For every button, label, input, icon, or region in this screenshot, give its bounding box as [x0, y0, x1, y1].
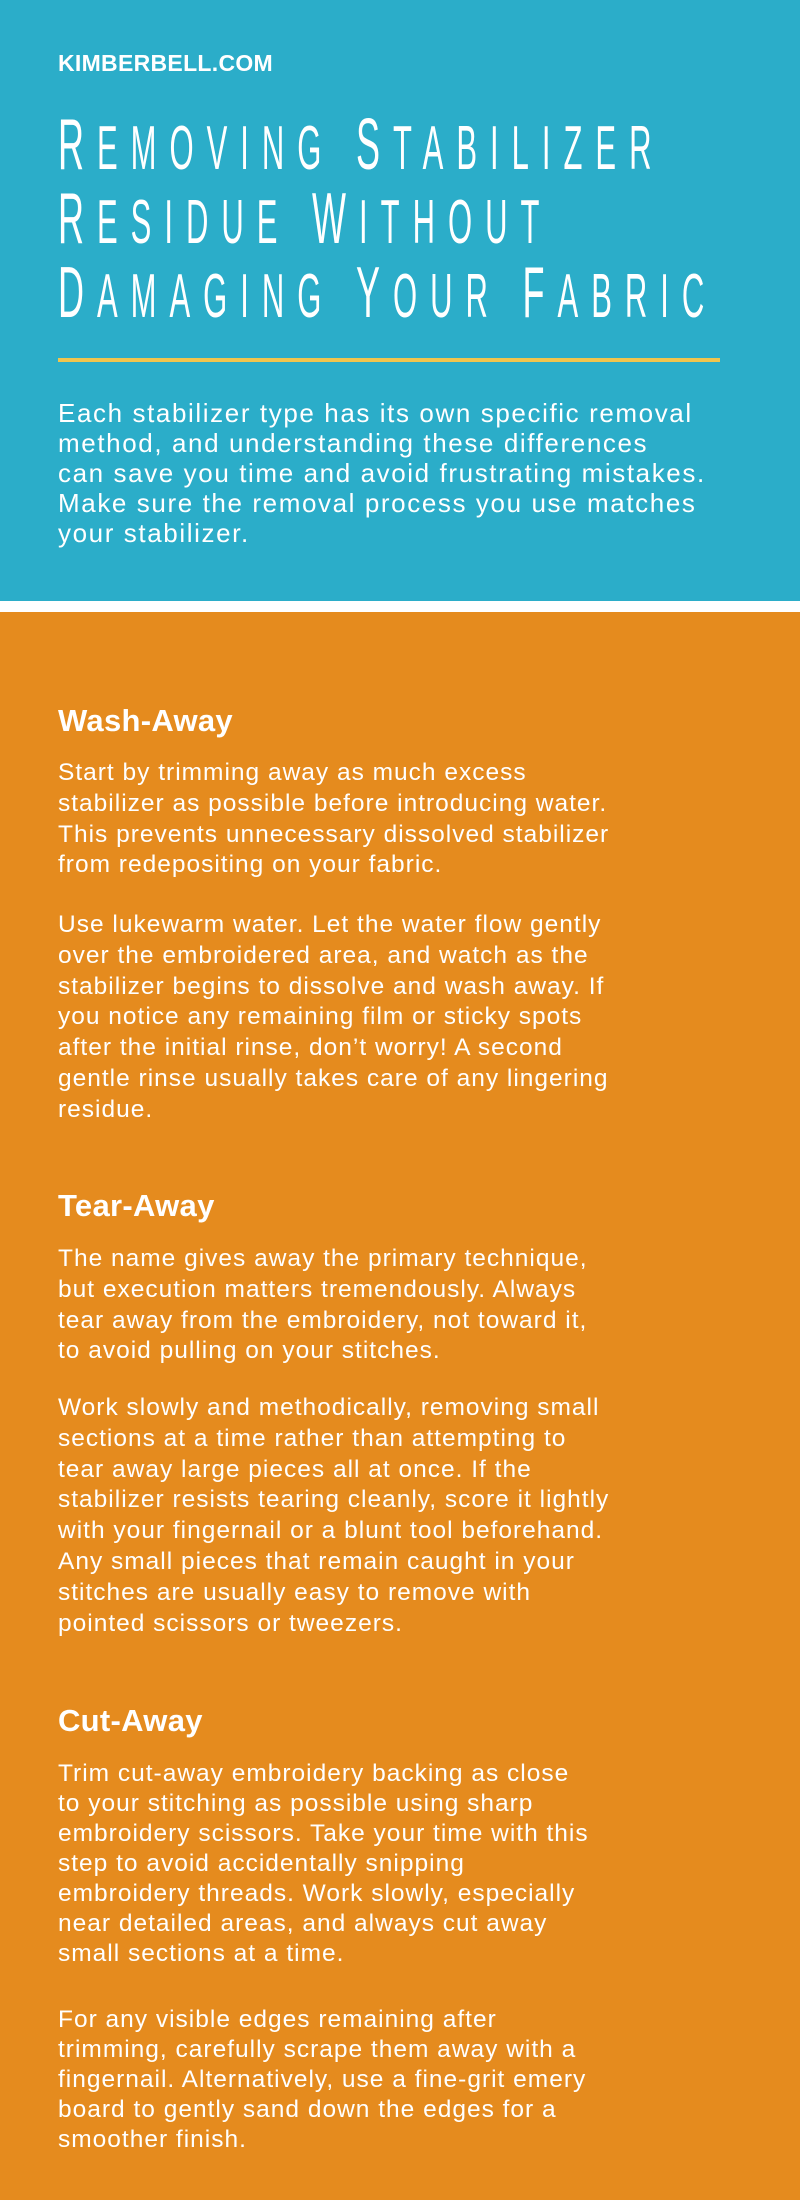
text: tear-away para 1	[58, 1245, 588, 1364]
text: tear-away para 2: stabilizer resists tearing cleanly, score it lightly	[58, 1486, 609, 1513]
title: RESIDUE WITHOUT	[58, 179, 552, 259]
text: wash-away para 1: from redepositing on your fabric.	[58, 851, 442, 878]
title: REMOVING STABILIZER	[58, 105, 664, 185]
text: cut-away para 1: small sections at a time.	[58, 1940, 344, 1967]
text: wash-away para 2: residue.	[58, 1096, 153, 1123]
text: tear-away para 1: The name gives away the primary technique,	[58, 1245, 588, 1272]
text: wash-away para 2: over the embroidered area, and watch as the	[58, 942, 589, 969]
header panel	[0, 0, 800, 601]
text: cut-away para 1: to your stitching as possible using sharp	[58, 1790, 533, 1817]
text: tear-away para 1: to avoid pulling on your stitches.	[58, 1337, 441, 1364]
text: tear-away para 2: stitches are usually easy to remove with	[58, 1579, 531, 1606]
text: cut-away para 2: smoother finish.	[58, 2126, 247, 2153]
yellow divider	[58, 358, 720, 362]
text: tear-away para 2	[58, 1394, 609, 1637]
intro text: Each stabilizer type has its own specific removal	[58, 398, 693, 428]
intro text: can save you time and avoid frustrating mistakes.	[58, 458, 706, 488]
text: tear-away para 2: tear away large pieces all at once. If the	[58, 1456, 532, 1483]
heading: Wash-Away: Wash-Away	[58, 703, 233, 738]
text: cut-away para 2: board to gently sand down the edges for a	[58, 2096, 557, 2123]
text: cut-away para 2: trimming, carefully scrape them away with a	[58, 2036, 576, 2063]
text: tear-away para 1: tear away from the embroidery, not toward it,	[58, 1307, 587, 1334]
text: cut-away para 1	[58, 1760, 589, 1967]
title	[58, 105, 717, 333]
text: wash-away para 2: Use lukewarm water. Let the water flow gently	[58, 911, 601, 938]
text: cut-away para 2: fingernail. Alternatively, use a fine-grit emery	[58, 2066, 586, 2093]
text: cut-away para 1: near detailed areas, and always cut away	[58, 1910, 547, 1937]
text: cut-away para 1: step to avoid accidentally snipping	[58, 1850, 465, 1877]
text: wash-away para 1: stabilizer as possible before introducing water.	[58, 790, 607, 817]
heading: Cut-Away: Cut-Away	[58, 1703, 203, 1738]
text: cut-away para 1: Trim cut-away embroidery backing as close	[58, 1760, 569, 1787]
intro text: Make sure the removal process you use matches	[58, 488, 696, 518]
intro text: your stabilizer.	[58, 518, 250, 548]
text: wash-away para 2: you notice any remaining film or sticky spots	[58, 1003, 582, 1030]
text: wash-away para 2: after the initial rinse, don’t worry! A second	[58, 1034, 563, 1061]
text: wash-away para 1: Start by trimming away as much excess	[58, 759, 527, 786]
text: cut-away para 1: embroidery threads. Work slowly, especially	[58, 1880, 575, 1907]
content panel	[0, 612, 800, 2200]
text: wash-away para 2	[58, 911, 609, 1123]
text: cut-away para 1: embroidery scissors. Take your time with this	[58, 1820, 589, 1847]
text: wash-away para 2: gentle rinse usually takes care of any lingering	[58, 1065, 609, 1092]
text: tear-away para 1: but execution matters tremendously. Always	[58, 1276, 576, 1303]
text: cut-away para 2	[58, 2006, 586, 2153]
text: tear-away para 2: Work slowly and methodically, removing small	[58, 1394, 599, 1421]
text: wash-away para 1: This prevents unnecessary dissolved stabilizer	[58, 821, 609, 848]
text: wash-away para 1	[58, 759, 609, 878]
text: tear-away para 2: sections at a time rather than attempting to	[58, 1425, 566, 1452]
text: wash-away para 2: stabilizer begins to dissolve and wash away. If	[58, 973, 604, 1000]
text: tear-away para 2: pointed scissors or tweezers.	[58, 1610, 403, 1637]
heading: Tear-Away: Tear-Away	[58, 1188, 215, 1223]
text: tear-away para 2: with your fingernail or a blunt tool beforehand.	[58, 1517, 603, 1544]
text: tear-away para 2: Any small pieces that remain caught in your	[58, 1548, 575, 1575]
intro text: method, and understanding these differences	[58, 428, 648, 458]
site name: KIMBERBELL.COM	[58, 50, 273, 76]
intro text	[58, 398, 706, 548]
title: DAMAGING YOUR FABRIC	[58, 253, 717, 333]
text: cut-away para 2: For any visible edges remaining after	[58, 2006, 497, 2033]
